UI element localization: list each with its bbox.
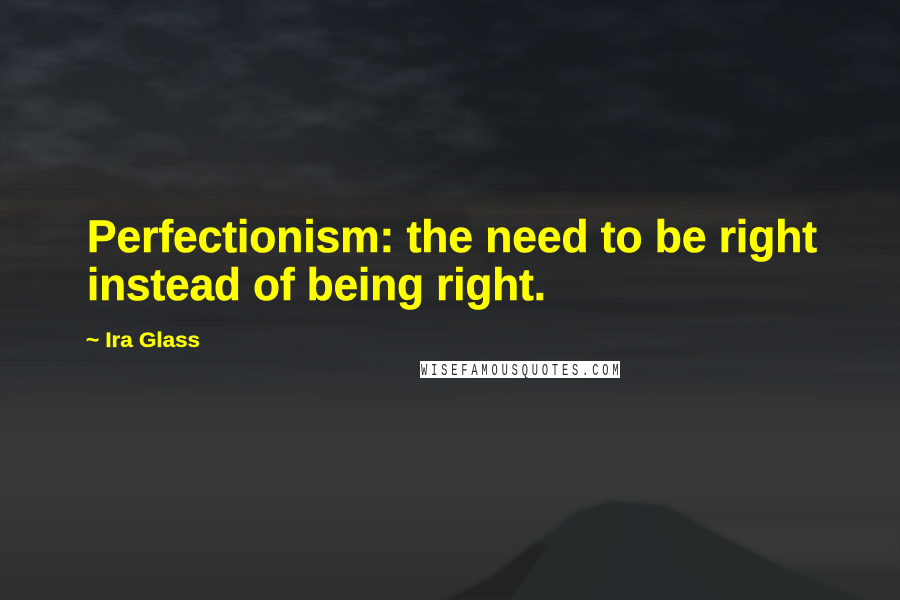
quote line 1: Perfectionism: the need to be right [87,211,817,262]
watermark text: WISEFAMOUSQUOTES.COM [421,363,619,381]
quote text [86,211,817,352]
watermark badge [420,361,620,381]
hill silhouette [440,501,862,600]
background: cloud texture [0,0,613,192]
attribution: ~ Ira Glass [86,329,200,352]
background: dark streaks [0,180,900,400]
background: horizon glow bands [0,198,900,565]
background: dark clouds [348,0,900,231]
quote line 2: instead of being right. [87,259,546,310]
